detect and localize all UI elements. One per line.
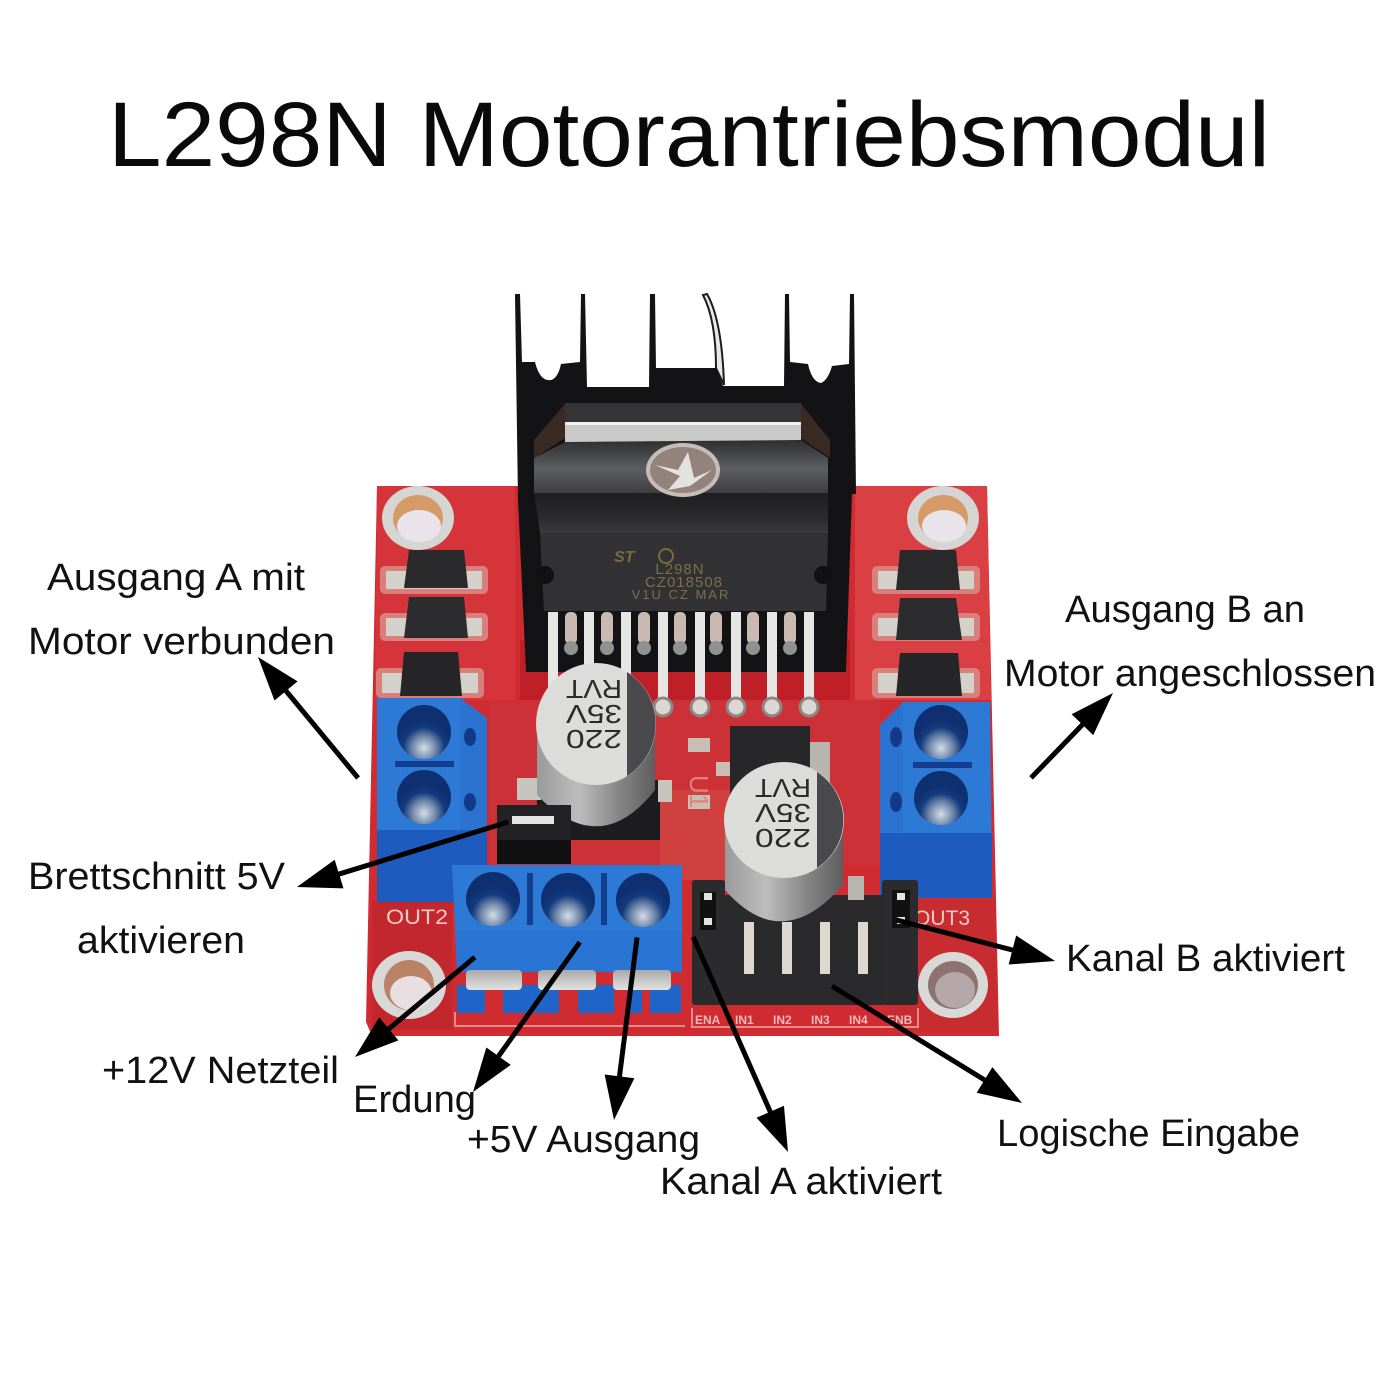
mounting screw <box>646 443 720 497</box>
label: 5V Ausgang: +5V Ausgang <box>467 1119 700 1161</box>
label: Kanal A: Kanal A aktiviert <box>660 1161 942 1203</box>
left capacitor <box>517 663 672 840</box>
header labels: ENB <box>887 1013 913 1027</box>
header labels: ENA <box>695 1013 721 1027</box>
label: Brettschnitt 5V <box>28 856 286 962</box>
arrow: Kanal A <box>679 931 802 1158</box>
label: Brettschnitt 5V: Brettschnitt 5V <box>28 856 286 898</box>
arrow: Logische Eingabe <box>824 973 1030 1116</box>
L298N chip: L298N <box>655 561 705 578</box>
voltage regulator: U1 <box>684 775 714 808</box>
label: Erdung: Erdung <box>353 1079 476 1121</box>
arrow: Kanal B <box>892 905 1059 976</box>
right output terminal <box>880 702 992 898</box>
L298N chip: CZ018508 <box>645 574 723 591</box>
L298N module photo <box>366 294 999 1036</box>
arrow: Ausgang A <box>246 647 370 788</box>
L298N chip: V1U CZ MAR <box>632 587 730 602</box>
label: Ausgang A: Motor verbunden <box>28 621 335 663</box>
title: L298N Motorantriebsmodul <box>108 84 1270 186</box>
SMD diodes right <box>872 550 980 698</box>
label: Ausgang A: Ausgang A mit <box>47 557 305 599</box>
arrow: 5V Ausgang <box>599 936 652 1122</box>
right capacitor: 220 <box>755 823 811 853</box>
arrow: 12V <box>345 946 484 1069</box>
header labels: IN1 <box>735 1013 754 1027</box>
header labels: IN4 <box>849 1013 868 1027</box>
chip pins <box>548 612 818 716</box>
left output terminal <box>377 698 487 902</box>
label: Brettschnitt 5V: aktivieren <box>77 920 245 962</box>
circuit board <box>366 486 999 1036</box>
arrow: Erdung <box>461 933 592 1101</box>
mounting holes <box>372 486 988 1019</box>
heat sink <box>515 294 856 672</box>
label: 12V: +12V Netzteil <box>102 1050 339 1092</box>
arrow: Ausgang B <box>1020 683 1124 788</box>
board-cut jumper <box>497 805 571 864</box>
right capacitor: RVT <box>755 773 811 803</box>
label: Ausgang B: Motor angeschlossen <box>1004 653 1376 695</box>
label: Ausgang B: Ausgang B an <box>1065 589 1305 631</box>
L298N chip: ST <box>614 549 636 566</box>
label: Logische Eingabe: Logische Eingabe <box>997 1113 1300 1155</box>
header labels: IN3 <box>811 1013 830 1027</box>
SMD diodes left <box>376 550 488 698</box>
L298N chip <box>534 403 832 611</box>
label: Ausgang A <box>28 557 335 663</box>
logic header <box>692 880 918 1005</box>
right capacitor <box>724 762 864 921</box>
left capacitor: RVT <box>566 674 622 704</box>
OUT labels <box>386 906 970 930</box>
left capacitor: 220 <box>566 724 622 754</box>
header labels <box>695 1013 913 1027</box>
label: Kanal B: Kanal B aktiviert <box>1066 938 1345 980</box>
label: Ausgang B <box>1004 589 1376 695</box>
arrow: Brettschnitt <box>293 808 513 901</box>
left capacitor: 35V <box>565 699 622 729</box>
OUT labels: OUT3 <box>914 907 970 930</box>
voltage regulator <box>684 726 830 809</box>
power terminal block <box>452 865 682 1013</box>
OUT labels: OUT2 <box>386 906 448 929</box>
right capacitor: 35V <box>754 798 811 828</box>
header labels: IN2 <box>773 1013 792 1027</box>
